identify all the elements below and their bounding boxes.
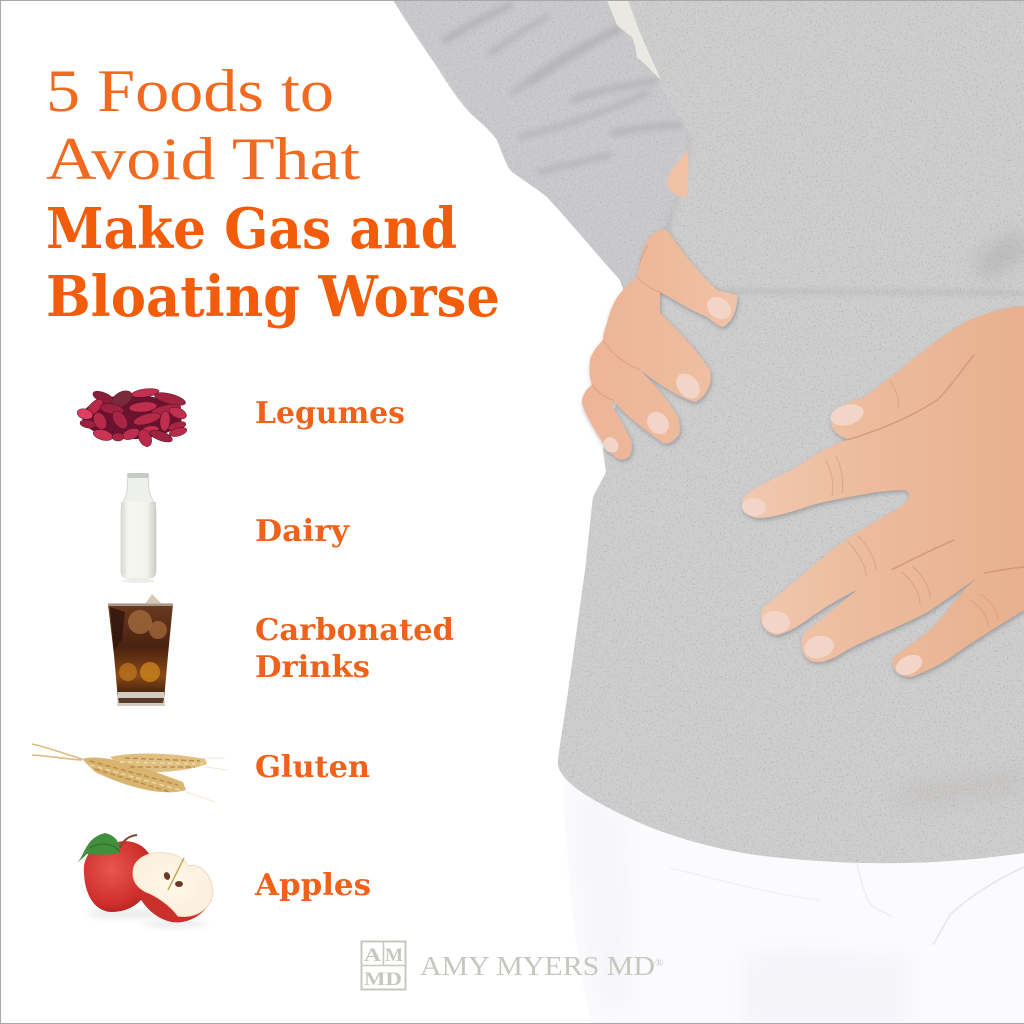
title	[46, 58, 500, 330]
background gap between arm and torso	[607, 0, 661, 80]
item: gluten	[32, 744, 370, 802]
logo: Amy Myers MD	[361, 942, 663, 990]
registered mark: ®	[655, 957, 663, 969]
icon: wheat ears	[32, 744, 228, 802]
grey sweater	[380, 0, 1024, 880]
hand: fingertip behind the back	[667, 150, 688, 197]
label: Dairy: Dairy	[255, 514, 351, 549]
icon: whole apple and apple half	[77, 833, 213, 927]
logo monogram box: A	[364, 945, 381, 966]
left hand on hip	[582, 229, 737, 460]
title line 2: Avoid That	[46, 126, 360, 192]
label: Gluten: Gluten	[255, 750, 370, 785]
title line 3: Make Gas and	[46, 196, 457, 262]
label: Carbonated Drinks: Drinks	[255, 650, 370, 685]
white trousers	[563, 770, 1024, 1024]
title line 1: 5 Foods to	[46, 58, 334, 124]
sleeve shading and folds	[440, 1, 684, 288]
label: Apples: Apples	[254, 868, 371, 903]
right hand on stomach	[741, 306, 1024, 679]
finger creases	[847, 355, 1024, 573]
label: Carbonated Drinks	[255, 613, 454, 685]
title line 4: Bloating Worse	[46, 264, 500, 330]
icon: glass of cola with ice	[108, 594, 173, 706]
item: apples	[77, 833, 371, 927]
nails, right hand	[741, 401, 925, 679]
logo monogram box: M	[385, 945, 403, 966]
logo monogram box	[361, 942, 406, 990]
photo: woman holding her stomach	[380, 0, 1024, 1024]
icon: kidney beans	[76, 387, 188, 449]
logo monogram box: MD	[364, 969, 402, 990]
icon: milk bottle	[121, 473, 156, 583]
fabric shadows	[720, 290, 1020, 294]
label: Legumes: Legumes	[255, 396, 405, 431]
nails, left hand	[600, 292, 735, 456]
item: carbonated drinks	[108, 594, 454, 706]
logo wordmark: AMY MYERS MD	[420, 951, 655, 981]
item: dairy	[121, 473, 351, 583]
item: legumes	[76, 387, 405, 449]
label: Carbonated Drinks: Carbonated	[255, 613, 454, 648]
